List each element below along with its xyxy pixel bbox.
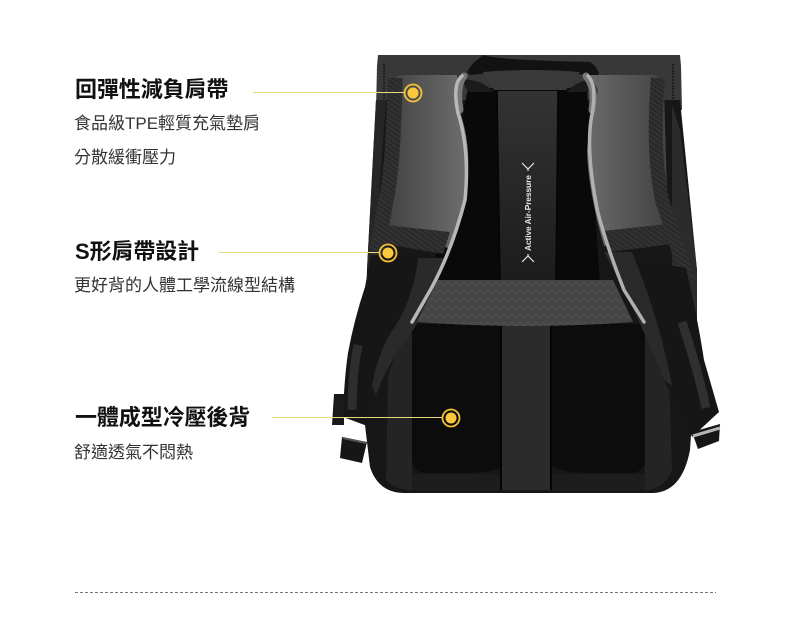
text: breathable: 舒適透氣不悶熱 xyxy=(74,443,193,462)
central spine channel xyxy=(430,88,600,284)
left strap buckle xyxy=(332,394,367,463)
backpack body xyxy=(362,100,697,493)
text: TPE cushion: 食品級TPE輕質充氣墊肩 xyxy=(74,114,260,133)
heading: 回彈性減負肩帶: 回彈性減負肩帶 xyxy=(75,77,228,102)
left lower strap xyxy=(343,255,446,427)
right lower strap xyxy=(604,252,719,437)
right strap buckle xyxy=(692,424,720,449)
callout line 2 and marker xyxy=(219,244,396,262)
callout line 3 and marker xyxy=(272,410,460,426)
backpack top flap xyxy=(376,55,682,110)
spine text: Active Air-Pressure: Active Air-Pressure xyxy=(523,175,533,251)
back mesh panel lower xyxy=(412,324,645,490)
back lower side panels xyxy=(386,325,672,490)
heading: S形肩帶設計: S形肩帶設計 xyxy=(75,239,199,264)
left shoulder pad xyxy=(376,75,468,255)
silver strap edges xyxy=(412,76,644,322)
herringbone waist band xyxy=(417,280,633,326)
callout line 1 and marker xyxy=(253,84,422,102)
spine text: Active Air-Pressure xyxy=(522,163,534,262)
dashed divider xyxy=(75,592,716,594)
right shoulder pad xyxy=(587,75,688,280)
text: ergonomic structure: 更好背的人體工學流線型結構 xyxy=(74,276,295,295)
side straps across xyxy=(380,224,672,254)
top carry handle xyxy=(462,55,599,92)
text: disperse pressure: 分散緩衝壓力 xyxy=(74,148,176,167)
heading: 一體成型冷壓後背: 一體成型冷壓後背 xyxy=(75,405,250,430)
